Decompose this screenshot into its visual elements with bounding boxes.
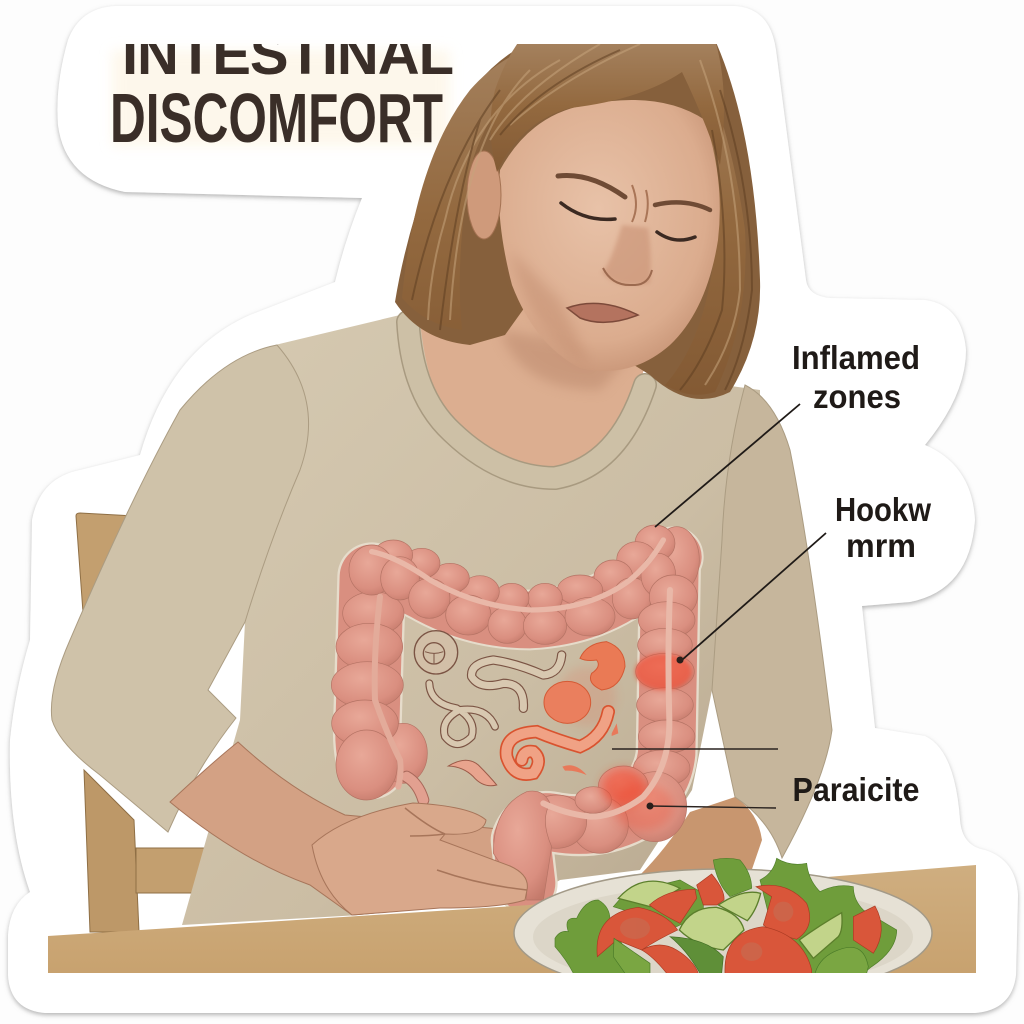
parasite: kidney shaped	[580, 642, 625, 690]
palm and fingers	[312, 803, 527, 915]
chair	[76, 513, 212, 932]
label: Hookw mrm	[835, 491, 931, 564]
torso sweater	[182, 315, 760, 925]
cheek shadow	[510, 250, 590, 365]
left sleeve	[51, 345, 309, 832]
table top	[48, 865, 976, 973]
lower leader line	[646, 802, 776, 810]
chair back post	[76, 513, 136, 640]
inflamed zones	[557, 653, 692, 830]
lettuce	[555, 858, 897, 973]
parasite: pale worm upper	[472, 655, 562, 708]
parasite: round body	[544, 681, 591, 723]
table	[48, 858, 976, 973]
colon diagram	[331, 525, 699, 900]
inflamed zones leader line	[655, 404, 800, 527]
left closed eye	[561, 203, 615, 219]
tomato pulp	[620, 902, 793, 961]
appendix	[407, 777, 423, 800]
neck shading	[500, 330, 640, 390]
hookworm leader line	[676, 533, 826, 664]
title line 2: Discomfort: DISCOMFORT	[110, 79, 443, 157]
transverse colon haustra	[349, 525, 699, 644]
title	[111, 44, 452, 148]
colon pale halo	[367, 557, 673, 883]
parasite: tiny fragments	[562, 723, 618, 775]
label: Hookw mrm: mrm	[846, 527, 916, 564]
parasite: small worm fragment	[448, 760, 497, 786]
left forearm	[170, 742, 525, 915]
frown lines	[632, 185, 648, 222]
title line 1: Intestinal (cropped): INTESTINAL	[122, 22, 454, 87]
neck	[418, 280, 660, 468]
sigmoid colon	[493, 766, 687, 900]
colon base tube	[367, 557, 673, 883]
dark cucumber	[670, 937, 723, 973]
collar	[408, 322, 645, 478]
hair back	[395, 30, 760, 399]
nose	[602, 225, 651, 285]
label: Hookw mrm: Hookw	[835, 491, 931, 528]
finger creases	[405, 808, 527, 890]
parasite: ring cyst	[414, 631, 458, 674]
right closed eye	[657, 232, 695, 240]
right sleeve	[712, 385, 832, 858]
front lettuce	[613, 938, 868, 973]
label: Paraicite: Paraicite	[792, 771, 920, 808]
descending band	[543, 590, 670, 817]
hair strands	[412, 44, 752, 390]
mouth	[567, 303, 638, 322]
left hand	[312, 803, 527, 915]
hair top	[490, 40, 724, 172]
plate	[513, 868, 933, 973]
descending colon haustra	[633, 575, 697, 787]
woman	[51, 30, 832, 925]
ascending band	[375, 597, 401, 787]
right eyebrow	[655, 202, 710, 210]
parasite: red coiled worm	[506, 712, 608, 774]
hair highlights	[406, 58, 746, 270]
parasite: loop worm	[429, 683, 495, 744]
chair leg	[84, 770, 139, 932]
tomatoes	[597, 874, 881, 973]
face	[499, 100, 720, 371]
colon inner band	[372, 540, 663, 610]
right forearm	[640, 797, 762, 875]
title glow	[112, 50, 450, 146]
left eyebrow	[558, 175, 625, 197]
cucumber slices	[618, 881, 842, 958]
label: Inflamed zones: Inflamed	[792, 339, 920, 376]
ascending colon haustra	[331, 592, 427, 800]
label: Inflamed zones	[792, 339, 920, 415]
ear	[467, 151, 501, 239]
parasite leader line	[612, 748, 778, 750]
salad	[555, 858, 897, 973]
label: Inflamed zones: zones	[813, 378, 901, 415]
chair crossbar	[136, 848, 212, 893]
plate inner	[533, 885, 913, 973]
